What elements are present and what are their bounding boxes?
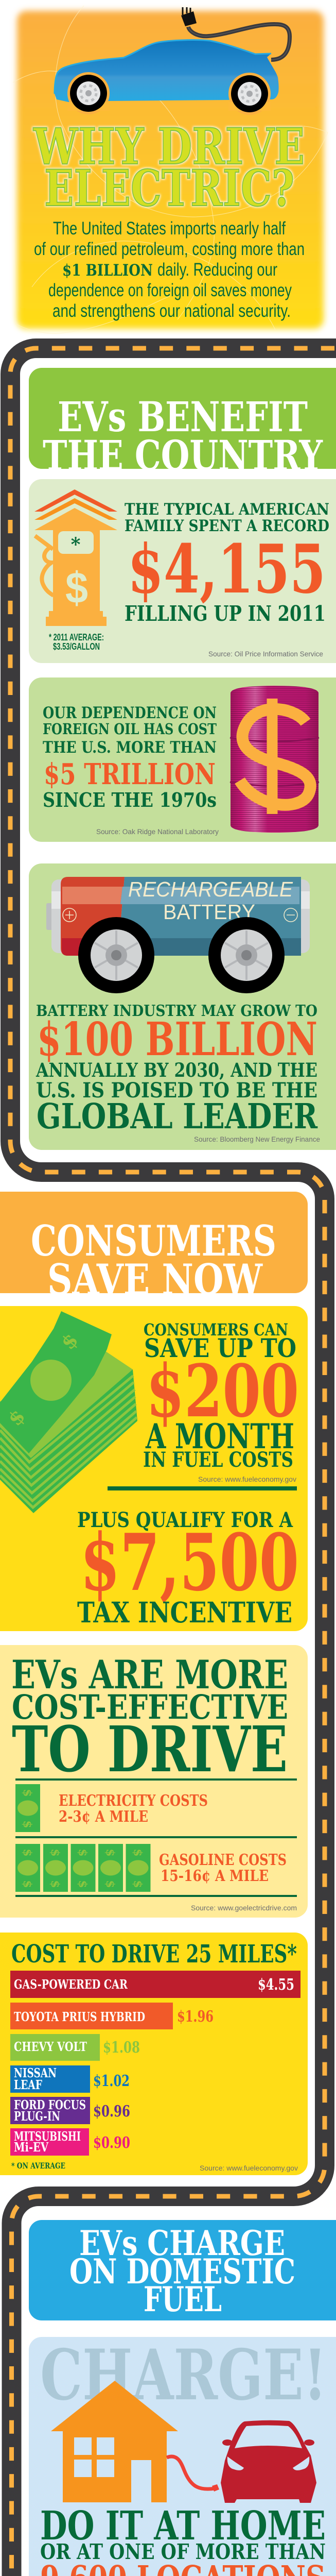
icon: gas pump: $ — [65, 564, 88, 613]
panel: EVs charge on domestic fuel header — [29, 2220, 336, 2320]
text: save up to 200 a month: SAVE UP TO — [144, 1333, 296, 1363]
text: save up to 200 a month: A MONTH — [145, 1416, 294, 1456]
text: electricity costs — [59, 1792, 208, 1826]
bar: Chevy Volt: $1.08 — [103, 2039, 140, 2057]
text: tax incentive: TAX INCENTIVE — [77, 1596, 292, 1629]
heading: consumers save now: SAVE NOW — [47, 1256, 263, 1304]
icon: gas pump: * — [71, 534, 81, 555]
source: Source: www.fueleconomy.gov — [200, 2164, 298, 2172]
heading: consumers save now — [31, 1217, 276, 1304]
intro text block: daily. Reducing our — [157, 260, 277, 280]
panel: battery industry — [29, 863, 336, 1150]
icon: stack of dollar bills — [0, 1311, 137, 1513]
source: Source: www.fueleconomy.gov — [198, 1475, 296, 1483]
text: save up to 200 a month: CONSUMERS CAN — [144, 1320, 288, 1340]
text: battery industry growth — [36, 1002, 318, 1137]
heading: EVs charge on domestic fuel: EVs CHARGE — [79, 2223, 285, 2263]
heading: EVs charge on domestic fuel: FUEL — [144, 2279, 222, 2319]
bar: Ford Focus plug-in — [10, 2097, 130, 2124]
icon: five bills — [15, 1844, 150, 1892]
text: tax incentive: PLUS QUALIFY FOR A — [77, 1508, 293, 1532]
text: dependence on foreign oil: $5 TRILLION — [44, 757, 216, 791]
text: save up to 200 a month: IN FUEL COSTS — [143, 1448, 293, 1472]
text: do it at home — [40, 2503, 326, 2576]
footnote: 2011 average: * 2011 AVERAGE: — [49, 632, 104, 642]
icon: stack of dollar bills: $ — [56, 1329, 82, 1354]
text: dependence on foreign oil: OUR DEPENDENCE ON — [43, 704, 217, 722]
icon: one bill — [15, 1784, 40, 1832]
icon: rechargeable battery on wheels — [46, 877, 310, 993]
source: Source: www.goelectricdrive.com — [191, 1904, 297, 1912]
intro text block: $1 BILLION — [62, 261, 153, 280]
text: electricity costs: ELECTRICITY COSTS — [59, 1792, 208, 1810]
bar: gas-powered car: $4.55 — [258, 1976, 294, 1994]
icon: gas pump — [34, 489, 117, 626]
panel: filling up — [29, 479, 336, 663]
source: Source: Bloomberg New Energy Finance — [194, 1135, 320, 1143]
bar: gas-powered car: GAS-POWERED CAR — [14, 1977, 128, 1992]
text: gasoline costs — [159, 1851, 287, 1885]
icon: five bills: $ — [103, 1849, 117, 1857]
text: gasoline costs: GASOLINE COSTS — [159, 1851, 287, 1869]
text: dependence on foreign oil: FOREIGN OIL HAS COST — [43, 720, 217, 738]
bar: Toyota Prius hybrid — [10, 2003, 214, 2029]
footnote: 2011 average — [49, 632, 104, 652]
icon: blue electric car with plug — [55, 7, 290, 115]
icon: five bills: $ — [76, 1880, 90, 1888]
bar: Nissan Leaf: LEAF — [14, 2077, 42, 2092]
heading: EVs are more cost-effective to drive — [11, 1652, 288, 1786]
icon: rechargeable battery on wheels: BATTERY — [163, 900, 255, 924]
text: save up to 200 a month — [143, 1320, 299, 1472]
bar: Chevy Volt: CHEVY VOLT — [14, 2039, 87, 2054]
bar: Nissan Leaf — [10, 2065, 130, 2093]
panel: consumers save now header — [0, 1192, 308, 1304]
title — [33, 117, 305, 217]
icon: five bills: $ — [131, 1849, 144, 1857]
icon: charging cord — [167, 2456, 215, 2489]
bar chart — [10, 1971, 300, 2156]
panel: intro — [13, 6, 328, 333]
icon: five bills: $ — [131, 1880, 144, 1888]
bar: Toyota Prius hybrid: TOYOTA PRIUS HYBRID — [14, 2009, 145, 2024]
icon: five bills: $ — [21, 1880, 34, 1888]
icon: oil barrel with dollar sign — [230, 686, 319, 833]
text: electricity costs: 2-3¢ A MILE — [59, 1808, 148, 1826]
icon: house — [51, 2381, 178, 2502]
panel: foreign oil cost — [29, 677, 336, 842]
panel: consumer savings — [0, 1306, 308, 1631]
panel: cost effective — [0, 1645, 308, 1918]
text: dependence on foreign oil: SINCE THE 1970s — [43, 788, 217, 811]
source: Source: Oil Price Information Service — [208, 650, 323, 658]
icon: one bill: $ — [21, 1820, 34, 1828]
icon: five bills: $ — [76, 1849, 90, 1857]
heading: EVs benefit the country — [43, 393, 323, 480]
bar: Nissan Leaf: NISSAN — [14, 2065, 57, 2080]
text: typical American family — [125, 500, 329, 626]
text: tax incentive — [77, 1508, 299, 1629]
text: dependence on foreign oil: THE U.S. MORE THAN — [43, 738, 217, 757]
icon: five bills: $ — [21, 1849, 34, 1857]
icon: one bill: $ — [21, 1789, 34, 1797]
bar: Mitsubishi Mi-EV: $0.90 — [93, 2134, 130, 2152]
panel: charge — [29, 2334, 336, 2576]
icon: five bills: $ — [103, 1880, 117, 1888]
icon: stack of dollar bills: $ — [3, 1405, 29, 1430]
heading: EVs charge on domestic fuel — [69, 2223, 295, 2319]
bar: Chevy Volt — [10, 2034, 140, 2061]
intro text block — [34, 218, 305, 321]
bar: Mitsubishi Mi-EV: MITSUBISHI — [14, 2129, 81, 2144]
bar: Ford Focus plug-in: $0.96 — [93, 2103, 130, 2121]
bar: Ford Focus plug-in: PLUG-IN — [14, 2109, 60, 2124]
icon: rechargeable battery on wheels: RECHARGEABLE — [128, 877, 293, 901]
panel: EVs benefit the country header — [29, 368, 336, 480]
icon: five bills: $ — [48, 1880, 62, 1888]
text: gasoline costs: 15-16¢ A MILE — [161, 1867, 269, 1885]
bar: Nissan Leaf: $1.02 — [93, 2072, 130, 2090]
source: Source: Oak Ridge National Laboratory — [96, 827, 219, 836]
bar: Ford Focus plug-in: FORD FOCUS — [14, 2097, 86, 2112]
bar: Toyota Prius hybrid: $1.96 — [177, 2008, 214, 2026]
footnote: 2011 average: $3.53/GALLON — [53, 641, 100, 652]
text: dependence on foreign oil — [43, 704, 217, 811]
bar: gas-powered car — [10, 1971, 300, 1998]
heading: EVs are more cost-effective to drive: COST-EFFECTIVE — [12, 1688, 288, 1727]
footnote: on average: * ON AVERAGE — [11, 2161, 65, 2171]
bar: Mitsubishi Mi-EV — [10, 2128, 130, 2156]
icon: five bills: $ — [48, 1849, 62, 1857]
panel: cost to drive 25 miles — [0, 1933, 308, 2175]
bar: Mitsubishi Mi-EV: Mi-EV — [14, 2140, 48, 2155]
icon: red car front view — [212, 2420, 316, 2503]
